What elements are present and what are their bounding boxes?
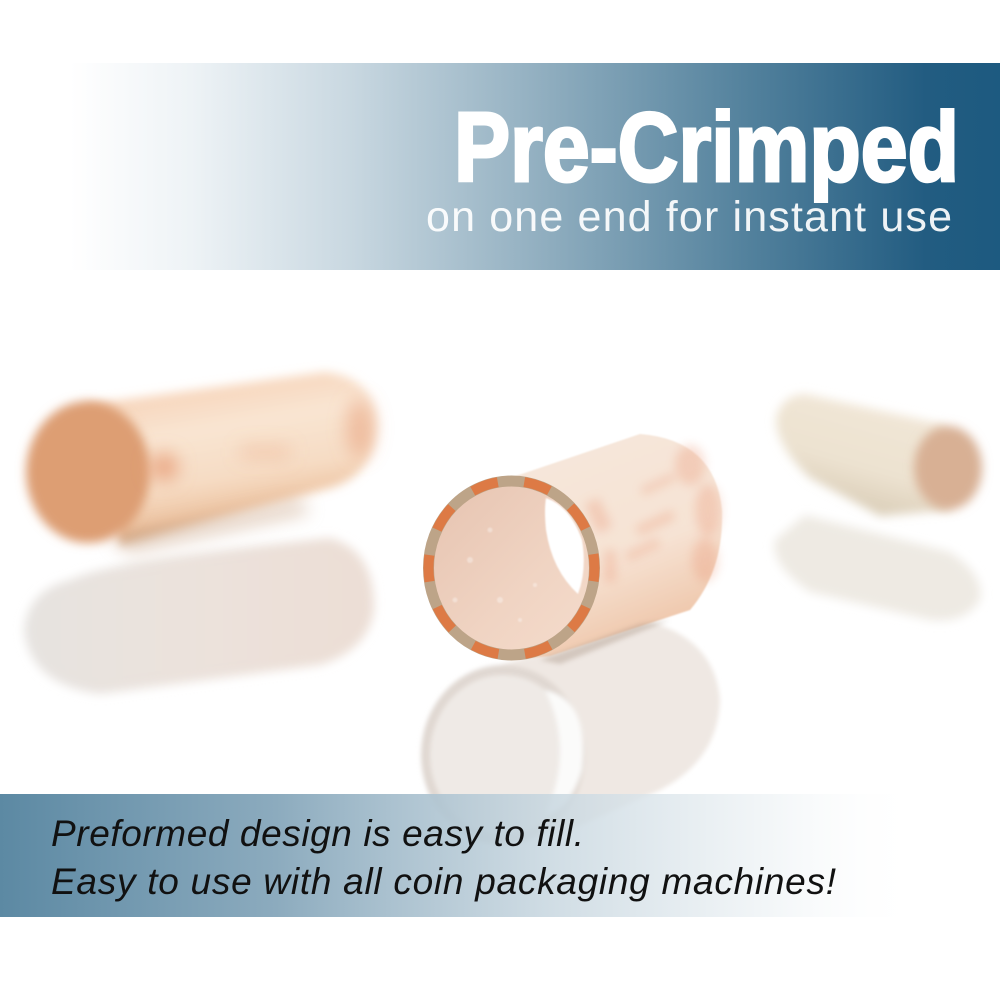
- tube body: [776, 394, 950, 516]
- center tube: [421, 434, 722, 845]
- tube end: [914, 426, 982, 510]
- left tube: [24, 372, 377, 694]
- print marks: [584, 445, 721, 582]
- interior texture: [452, 528, 537, 622]
- top banner: [70, 63, 1000, 270]
- right tube: [774, 394, 982, 621]
- contact shadow: [110, 500, 310, 552]
- reflection of right tube: [774, 515, 981, 621]
- tube end: [26, 401, 150, 543]
- caption line one: Preformed design is easy to fill.: [51, 813, 584, 854]
- tube body: [510, 434, 722, 660]
- subtitle: on one end for instant use: [426, 193, 952, 241]
- faded print marks: [150, 398, 374, 481]
- reflection of center tube: [421, 622, 720, 845]
- opening through tube: [545, 498, 584, 594]
- bottom banner: [0, 794, 920, 917]
- orange rim segments: [428, 481, 594, 655]
- tube body: [85, 372, 377, 545]
- contact shadow: [540, 620, 670, 664]
- tube rim: [428, 481, 594, 655]
- reflection of left tube: [24, 538, 374, 694]
- caption line two: Easy to use with all coin packaging machines!: [51, 861, 836, 902]
